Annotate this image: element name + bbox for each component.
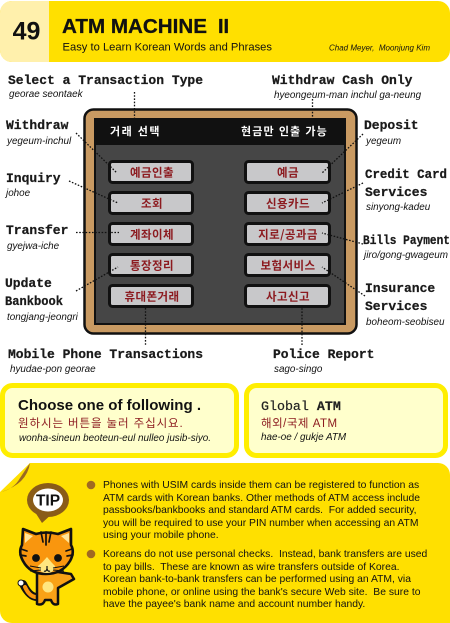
label: update bankbook: Update [5,276,52,291]
label: police report [273,347,374,375]
label: update bankbook: Bankbook [5,294,63,309]
tip text 1: using your mobile phone. [103,530,219,541]
button: update bankbook [110,254,192,276]
cat eyes [32,554,62,562]
leader lines [69,92,365,345]
label: inquiry [4,171,61,199]
label: select a transaction type: Select a Transaction Type [8,73,203,88]
label: insurance services: Services [365,299,428,314]
label: withdraw [6,118,72,147]
cat whiskers and mouth [30,566,64,571]
cat mascot [18,529,74,604]
label: withdraw: yegeum-inchul [6,136,72,147]
tip text 1: passbooks/bankbooks and standard ATM cards. For added security, [103,505,417,516]
lesson number: 49 [13,18,40,46]
panel: choose one: wonha-sineun beoteun-eul nulleo jusib-siyo. [19,433,211,444]
button: deposit [246,162,330,182]
label: mobile phone transactions: hyudae-pon georae [10,364,96,375]
label: withdraw cash only: Withdraw Cash Only [272,73,413,88]
tip text 2: mobile phone, or online using the bank's secure Web site. Be sure to [103,587,421,598]
button: update bankbook: 통장정리 [130,258,174,274]
label: credit card services: Credit Card [365,167,447,182]
button: insurance [246,254,330,276]
button: withdraw: 예금인출 [130,164,174,180]
label: select a transaction type: georae seontaek [9,89,84,100]
cat head [20,529,73,574]
button: insurance: 보험서비스 [261,258,315,274]
button: transfer: 계좌이체 [130,226,174,242]
tip text 1: you will be required to use your PIN number when accessing an ATM [103,518,418,529]
button: withdraw [110,162,192,182]
folded corner [1,463,30,492]
tip speech bubble [27,483,69,523]
label: credit card services: sinyong-kadeu [366,202,431,213]
label: withdraw cash only: hyeongeum-man inchul ga-neung [274,90,422,101]
label: credit card services [365,167,447,213]
label: transfer: gyejwa-iche [7,241,60,252]
cat muzzle [38,557,55,573]
label: inquiry: johoe [4,188,31,199]
label: insurance services: boheom-seobiseu [366,317,445,328]
label: update bankbook: tongjang-jeongri [7,312,79,323]
cat tail [18,580,38,597]
label: update bankbook [5,276,79,323]
panel: global ATM [246,386,446,456]
label: mobile phone transactions: Mobile Phone Transactions [8,347,203,362]
bullet 2 [87,550,95,558]
header banner [0,1,450,62]
tip text 1: ATM cards with Korean banks. Other methods of ATM access include [103,493,420,504]
button: deposit: 예금 [277,164,299,180]
label: transfer: Transfer [6,223,68,238]
panel: choose one: 원하시는 버튼을 눌러 주십시요. [18,416,184,430]
panel: global ATM: Global ATM [261,399,341,414]
button: mobile [110,286,192,306]
cat ears [25,533,69,543]
authors: Chad Meyer, Moonjung Kim [329,44,431,52]
tip speech bubble: TIP [36,492,60,510]
tip text 2: Koreans do not use personal checks. Instead, bank transfers are used [103,549,428,560]
label: police report: sago-singo [274,364,323,375]
button: inquiry: 조회 [141,196,163,212]
label: mobile phone transactions [8,347,203,375]
label: insurance services [365,281,445,328]
button: credit card [246,192,330,214]
label: deposit: yegeum [365,136,401,147]
tip text 2: to pay bills. These are known as wire transfers outside of Korea. [103,562,399,573]
label: select a transaction type [8,73,203,100]
label: bills payment [362,233,450,261]
tip text 1: Phones with USIM cards inside them can be registered to function as [103,480,419,491]
button: transfer [110,224,192,244]
button: credit card: 신용카드 [266,196,310,212]
label: withdraw cash only [272,73,422,101]
label: credit card services: Services [365,185,428,200]
cat belly [42,582,54,592]
panel: choose one: Choose one of following . [18,397,201,414]
title: ATM MACHINE [62,16,207,38]
label: bills payment: jiro/gong-gwageum [362,250,448,261]
label: deposit [364,118,419,147]
screen heading right: 현금만 인출 가능 [241,124,328,138]
tip text 2: have the payee's bank name and account number handy. [103,599,365,610]
button: inquiry [110,192,192,214]
screen heading left: 거래 선택 [110,124,161,138]
tip text 2: Korean bank-to-bank transfers can be performed using an ATM, via [103,574,411,585]
label: transfer [6,223,68,252]
label: inquiry: Inquiry [6,171,61,186]
label: police report: Police Report [273,347,374,362]
button: bills [246,224,330,244]
title numeral: II [218,16,229,38]
panel: global ATM: 해외/국제 ATM [261,417,338,430]
button: police [246,286,330,306]
panel: global ATM: hae-oe / gukje ATM [261,432,347,443]
button: bills: 지로/공과금 [258,226,318,242]
button: mobile: 휴대폰거래 [125,288,179,304]
button: police: 사고신고 [266,288,310,304]
subtitle: Easy to Learn Korean Words and Phrases [62,42,273,54]
bullet 1 [87,481,95,489]
label: insurance services: Insurance [365,281,435,296]
cat stripes [20,532,73,556]
ATM machine [84,110,356,334]
label: deposit: Deposit [364,118,419,133]
label: withdraw: Withdraw [6,118,69,133]
cat body [37,572,74,604]
panel: choose one [2,386,236,456]
